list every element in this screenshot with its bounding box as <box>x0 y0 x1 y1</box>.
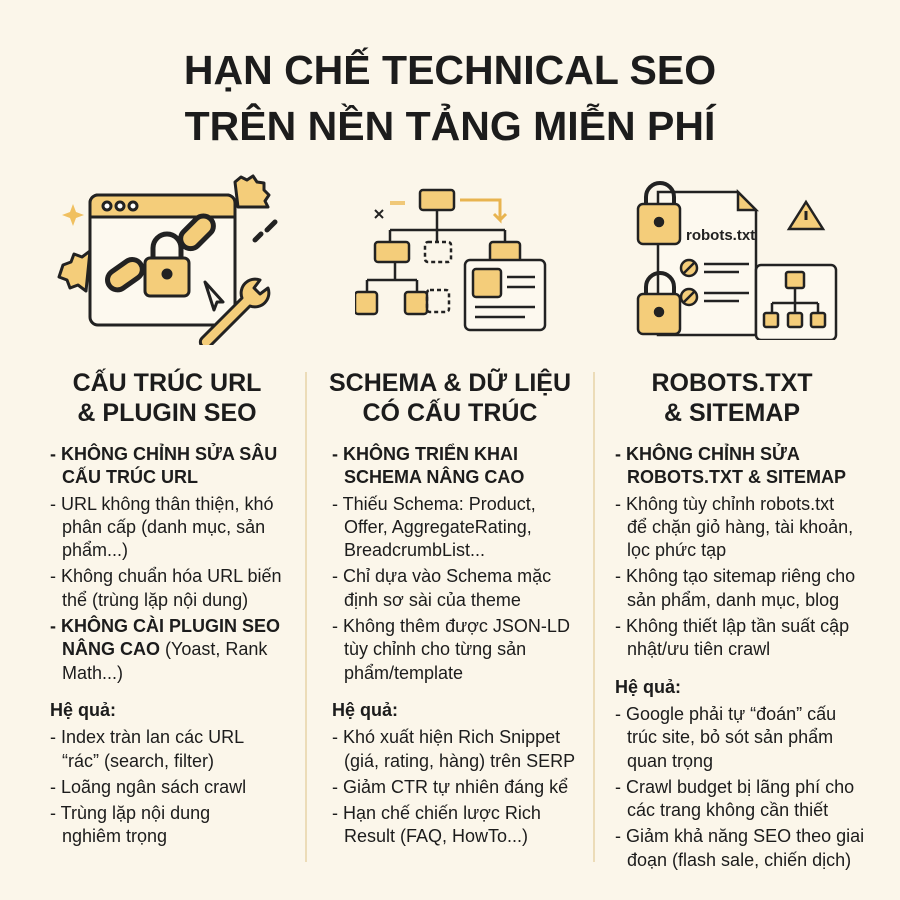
text: col3: sản phẩm, danh mục, blog <box>627 590 839 610</box>
title: HẠN CHẾ TECHNICAL SEO <box>184 47 716 93</box>
heading: col3: ROBOTS.TXT <box>651 369 813 397</box>
text: col3: lọc phức tạp <box>627 540 726 560</box>
text: col2: - Giảm CTR tự nhiên đáng kể <box>332 777 568 797</box>
text: col3: - Không tùy chỉnh robots.txt <box>615 494 834 514</box>
text: col3: các trang không cần thiết <box>627 800 828 820</box>
text: col1: NÂNG CAO (Yoast, Rank <box>62 639 267 659</box>
heading: col2: SCHEMA & DỮ LIỆU <box>329 369 571 397</box>
text: col1: thể (trùng lặp nội dung) <box>62 590 248 610</box>
text: col2: Result (FAQ, HowTo...) <box>344 826 528 846</box>
text: col1: “rác” (search, filter) <box>62 751 214 771</box>
text: col2: BreadcrumbList... <box>344 540 485 560</box>
text: col1 <box>50 443 282 846</box>
icon: browser with locked chain <box>58 174 278 345</box>
heading: col1: & PLUGIN SEO <box>77 399 257 427</box>
text: col1: nghiêm trọng <box>62 826 167 846</box>
text: col3: - KHÔNG CHỈNH SỬA <box>615 444 800 464</box>
text: col1: - URL không thân thiện, khó <box>50 494 273 514</box>
text: col3 <box>615 443 864 870</box>
text: col1: phân cấp (danh mục, sản <box>62 517 265 537</box>
text: col1: Math...) <box>62 663 123 683</box>
text: col3: - Không thiết lập tần suất cập <box>615 616 849 636</box>
heading: col1 <box>73 368 261 427</box>
text: col2: - Thiếu Schema: Product, <box>332 494 536 514</box>
text: col2: - Chỉ dựa vào Schema mặc <box>332 566 551 586</box>
icon: robots.txt <box>636 181 838 340</box>
text: col1: - Trùng lặp nội dung <box>50 803 210 823</box>
icon: schema tree <box>355 188 546 332</box>
text: col2: - KHÔNG TRIỂN KHAI <box>332 444 518 464</box>
text: col1: phẩm...) <box>62 540 128 560</box>
text: col2: - Hạn chế chiến lược Rich <box>332 803 541 823</box>
text: col3: - Google phải tự “đoán” cấu <box>615 704 836 724</box>
text: col2: - Khó xuất hiện Rich Snippet <box>332 727 560 747</box>
text: col2 <box>332 443 575 846</box>
text: col2: - Không thêm được JSON-LD <box>332 616 570 636</box>
text: col3: để chặn giỏ hàng, tài khoản, <box>627 517 853 537</box>
text: col2: tùy chỉnh cho từng sản <box>344 639 526 659</box>
heading: col2: CÓ CẤU TRÚC <box>362 399 538 427</box>
text: col3: Hệ quả: <box>615 677 681 697</box>
text: col1: - Loãng ngân sách crawl <box>50 777 246 797</box>
text: col1: - KHÔNG CHỈNH SỬA SÂU <box>50 444 277 464</box>
text: col3: trúc site, bỏ sót sản phẩm <box>627 727 833 747</box>
title: TRÊN NỀN TẢNG MIỄN PHÍ <box>185 103 715 149</box>
heading: col3: & SITEMAP <box>664 399 800 427</box>
text: col1: - Không chuẩn hóa URL biến <box>50 566 282 586</box>
heading: col1: CẤU TRÚC URL <box>73 369 261 397</box>
title <box>184 47 716 149</box>
text: col1: - Index tràn lan các URL <box>50 727 244 747</box>
text: col3: - Crawl budget bị lãng phí cho <box>615 777 854 797</box>
text: col3: nhật/ưu tiên crawl <box>627 639 770 659</box>
text: col2: (giá, rating, hàng) trên SERP <box>344 751 575 771</box>
text: col3: - Không tạo sitemap riêng cho <box>615 566 855 586</box>
text: col2: định sơ sài của theme <box>344 590 521 610</box>
text: col3: đoạn (flash sale, chiến dịch) <box>627 850 851 870</box>
text: col2: SCHEMA NÂNG CAO <box>344 467 524 487</box>
text: col1: Hệ quả: <box>50 700 116 720</box>
text: col2: phẩm/template <box>344 663 463 683</box>
text: col3: - Giảm khả năng SEO theo giai <box>615 826 864 846</box>
text: col1: CẤU TRÚC URL <box>62 467 198 487</box>
text: col1: - KHÔNG CÀI PLUGIN SEO <box>50 616 280 636</box>
text: col3: ROBOTS.TXT & SITEMAP <box>627 467 846 487</box>
text: col2: Hệ quả: <box>332 700 398 720</box>
icon: robots.txt: robots.txt <box>686 227 755 244</box>
heading: col2 <box>329 368 571 427</box>
heading: col3 <box>651 369 813 427</box>
text: col2: Offer, AggregateRating, <box>344 517 532 537</box>
text: col3: quan trọng <box>627 751 713 771</box>
